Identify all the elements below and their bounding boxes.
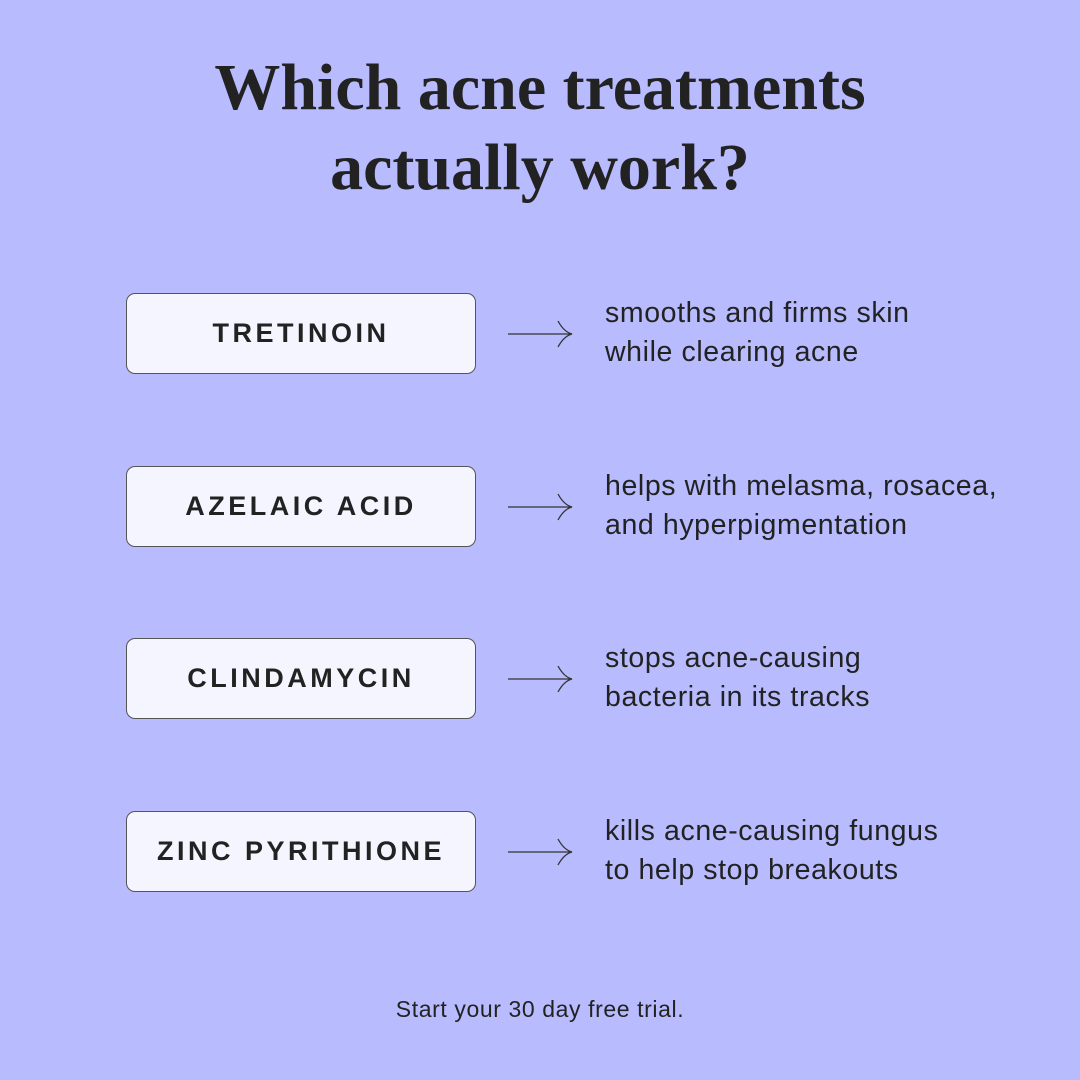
label box [126, 811, 476, 892]
label box [126, 293, 476, 374]
title [214, 51, 866, 204]
description: bacteria in its tracks [605, 681, 870, 713]
description: smooths and firms skin [605, 297, 910, 329]
label box: TRETINOIN [212, 318, 390, 348]
description: kills acne-causing fungus [605, 815, 938, 847]
footer: Start your 30 day free trial. [396, 996, 684, 1022]
row: azelaic acid [126, 466, 997, 547]
description [605, 470, 997, 541]
description: stops acne-causing [605, 642, 861, 674]
arrow [508, 320, 572, 348]
label box: ZINC PYRITHIONE [157, 836, 445, 866]
description: to help stop breakouts [605, 854, 899, 886]
row: clindamycin [126, 638, 870, 719]
title: Which acne treatments [214, 51, 866, 124]
arrow [508, 666, 572, 692]
label box: CLINDAMYCIN [187, 663, 415, 693]
row: tretinoin [126, 293, 910, 374]
description: while clearing acne [605, 336, 859, 368]
label box [126, 638, 476, 719]
label box: AZELAIC ACID [185, 491, 417, 521]
title: actually work? [330, 131, 750, 204]
description [605, 297, 910, 368]
description [605, 642, 870, 713]
label box [126, 466, 476, 547]
row: zinc pyrithione [126, 811, 938, 892]
arrow [508, 494, 572, 520]
description [605, 815, 938, 886]
description: helps with melasma, rosacea, [605, 470, 997, 502]
arrow [508, 838, 572, 866]
description: and hyperpigmentation [605, 509, 908, 541]
